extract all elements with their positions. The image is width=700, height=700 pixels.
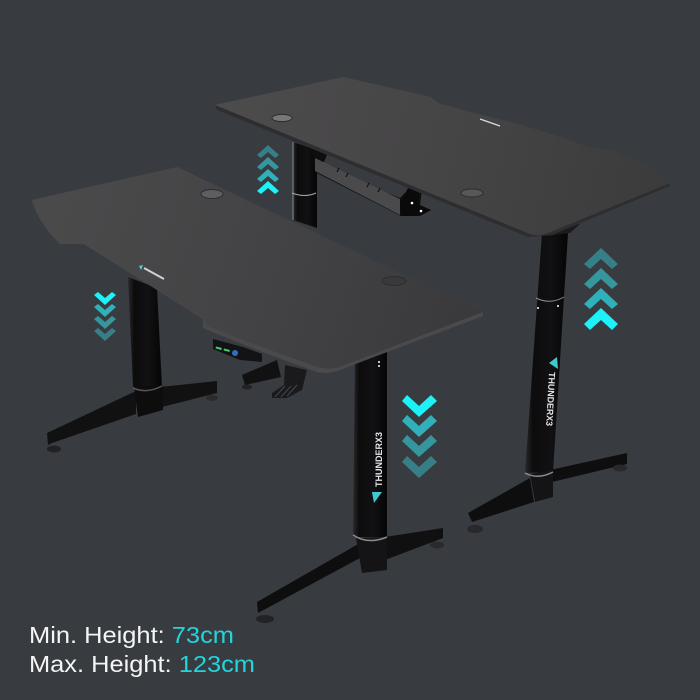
leg brand text: front: THUNDERX3 bbox=[374, 432, 384, 487]
back desktop bbox=[215, 77, 670, 237]
leg logo: front bbox=[372, 492, 382, 503]
minimum height: Min. Height: 73cm bbox=[29, 622, 234, 648]
grommet bbox=[272, 114, 292, 122]
chevrons: back right, rising bbox=[584, 248, 618, 330]
front desktop bbox=[32, 167, 483, 373]
leg logo: back bbox=[549, 357, 558, 369]
chevrons: front left, lowering bbox=[94, 292, 116, 341]
chevrons: back left, rising bbox=[257, 145, 279, 194]
leg brand text: back: THUNDERX3 bbox=[544, 372, 557, 426]
front left leg bbox=[47, 277, 218, 452]
chevrons: front right, lowering bbox=[402, 395, 437, 478]
desk logo bbox=[480, 119, 500, 126]
back right leg bbox=[467, 224, 627, 533]
front desk: lowered position bbox=[32, 167, 483, 623]
control panel bbox=[213, 339, 262, 362]
grommet bbox=[201, 190, 223, 198]
grommet bbox=[461, 189, 483, 197]
grommet bbox=[382, 276, 406, 286]
back left leg bbox=[292, 142, 317, 228]
front right leg bbox=[256, 352, 444, 623]
height specifications bbox=[29, 622, 255, 677]
under-desk headset holder bbox=[242, 360, 307, 398]
maximum height: Max. Height: 123cm bbox=[29, 651, 255, 677]
back desk: raised position bbox=[215, 77, 670, 533]
desk logo bbox=[139, 265, 164, 279]
cable tray bbox=[306, 145, 431, 216]
